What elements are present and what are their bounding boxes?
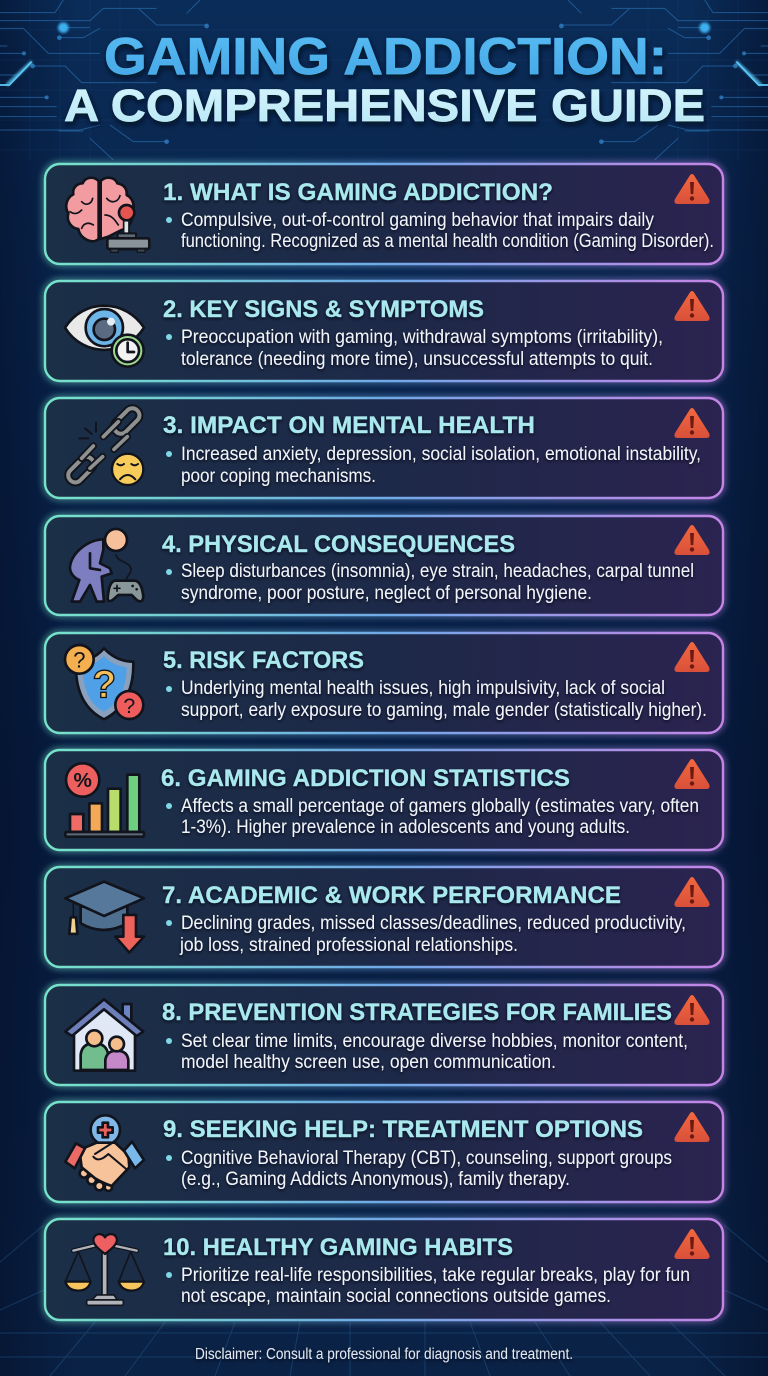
- heading: 10. HEALTHY GAMING HABITS: [163, 1234, 513, 1261]
- heading: 5. RISK FACTORS: [163, 647, 364, 674]
- icon: warning triangle: [674, 525, 710, 555]
- body text: [166, 561, 694, 604]
- icon: hunched person with controller: [70, 529, 143, 602]
- icon: warning triangle: [674, 408, 710, 438]
- body text: [166, 444, 701, 487]
- panel 10: healthy gaming habits: [45, 1219, 723, 1320]
- body text: [166, 913, 686, 956]
- icon: warning triangle: [674, 995, 710, 1025]
- panel 2: key signs and symptoms: [45, 281, 723, 381]
- body text: 1-3%). Higher prevalence in adolescents and young adults.: [181, 817, 630, 838]
- body text: Preoccupation with gaming, withdrawal symptoms (irritability),: [181, 327, 663, 348]
- icon: warning triangle: [674, 1229, 710, 1259]
- icon: brain with joystick: [66, 178, 149, 252]
- icon: graduation cap with down arrow: [65, 882, 144, 953]
- icon: warning triangle: [674, 877, 710, 907]
- body text: Declining grades, missed classes/deadlines, reduced productivity,: [181, 913, 686, 934]
- panel 6: gaming addiction statistics: [45, 750, 723, 850]
- icon: shield with question marks: ?: [123, 694, 135, 718]
- body text: model healthy screen use, open communication.: [181, 1052, 556, 1073]
- body text: tolerance (needing more time), unsuccessful attempts to quit.: [181, 349, 653, 370]
- body text: Compulsive, out-of-control gaming behavior that impairs daily: [181, 210, 654, 231]
- panel frame: [45, 633, 723, 733]
- icon: bar chart with percent badge: %: [73, 769, 92, 792]
- panel 1: what is gaming addiction: [45, 164, 723, 264]
- icon: warning triangle: [674, 174, 710, 204]
- heading: 7. ACADEMIC & WORK PERFORMANCE: [162, 882, 621, 909]
- icon: handshake with medical cross: [65, 1115, 144, 1191]
- body text: Increased anxiety, depression, social isolation, emotional instability,: [181, 444, 701, 465]
- heading: 8. PREVENTION STRATEGIES FOR FAMILIES: [162, 999, 672, 1026]
- panel 7: academic and work performance: [45, 867, 723, 967]
- panel frame: [45, 985, 723, 1085]
- heading: 9. SEEKING HELP: TREATMENT OPTIONS: [163, 1116, 643, 1143]
- heading: 2. KEY SIGNS & SYMPTOMS: [163, 296, 484, 323]
- body text: Sleep disturbances (insomnia), eye strain, headaches, carpal tunnel: [181, 561, 694, 582]
- title line 1: GAMING ADDICTION:: [104, 28, 667, 86]
- icon: broken chain with sad face: [65, 405, 143, 485]
- panel frame: [45, 867, 723, 967]
- body text: Set clear time limits, encourage diverse hobbies, monitor content,: [181, 1031, 688, 1052]
- icon: shield with question marks: ?: [93, 664, 116, 707]
- disclaimer: Disclaimer: Consult a professional for diagnosis and treatment.: [195, 1346, 573, 1363]
- body text: (e.g., Gaming Addicts Anonymous), family therapy.: [181, 1169, 570, 1190]
- panel 4: physical consequences: [45, 516, 723, 615]
- panel frame: [45, 164, 723, 264]
- body text: syndrome, poor posture, neglect of personal hygiene.: [181, 583, 592, 604]
- icon: eye with clock: [65, 306, 144, 367]
- icon: bar chart with percent badge: [65, 763, 144, 837]
- panel frame: [45, 1219, 723, 1320]
- panel 5: risk factors: [45, 633, 723, 733]
- body text: Underlying mental health issues, high impulsivity, lack of social: [181, 678, 665, 699]
- body text: [166, 1265, 690, 1307]
- panel frame: [45, 1102, 723, 1202]
- panel frame: [45, 398, 723, 498]
- body text: [166, 210, 714, 252]
- icon: shield with question marks: [65, 645, 143, 719]
- heading: 6. GAMING ADDICTION STATISTICS: [161, 765, 570, 792]
- body text: poor coping mechanisms.: [181, 466, 376, 487]
- heading: 4. PHYSICAL CONSEQUENCES: [162, 531, 515, 558]
- icon: warning triangle: [674, 1112, 710, 1142]
- body text: Cognitive Behavioral Therapy (CBT), counseling, support groups: [181, 1148, 672, 1169]
- body text: support, early exposure to gaming, male gender (statistically higher).: [181, 700, 707, 721]
- body text: not escape, maintain social connections outside games.: [181, 1286, 611, 1307]
- title line 2: A COMPREHENSIVE GUIDE: [64, 80, 705, 131]
- panel 8: prevention strategies for families: [45, 985, 723, 1085]
- icon: shield with question marks: ?: [73, 647, 85, 672]
- icon: warning triangle: [674, 642, 710, 672]
- panel 3: impact on mental health: [45, 398, 723, 498]
- icon: warning triangle: [674, 759, 710, 789]
- panel frame: [45, 750, 723, 850]
- panel frame: [45, 516, 723, 615]
- body text: [166, 678, 707, 721]
- icon: balance scale with heart: [65, 1234, 144, 1305]
- panel frame: [45, 281, 723, 381]
- icon: house with family: [65, 999, 143, 1071]
- heading: 3. IMPACT ON MENTAL HEALTH: [163, 412, 535, 439]
- panel 9: seeking help treatment options: [45, 1102, 723, 1202]
- body text: job loss, strained professional relationships.: [179, 935, 518, 956]
- body text: [166, 327, 663, 370]
- title: [64, 28, 705, 131]
- body text: [166, 1031, 688, 1073]
- body text: [166, 796, 699, 838]
- heading: 1. WHAT IS GAMING ADDICTION?: [163, 179, 553, 206]
- icon: warning triangle: [674, 291, 710, 321]
- body text: [166, 1148, 672, 1190]
- body text: Prioritize real-life responsibilities, take regular breaks, play for fun: [181, 1265, 690, 1286]
- body text: Affects a small percentage of gamers globally (estimates vary, often: [181, 796, 699, 817]
